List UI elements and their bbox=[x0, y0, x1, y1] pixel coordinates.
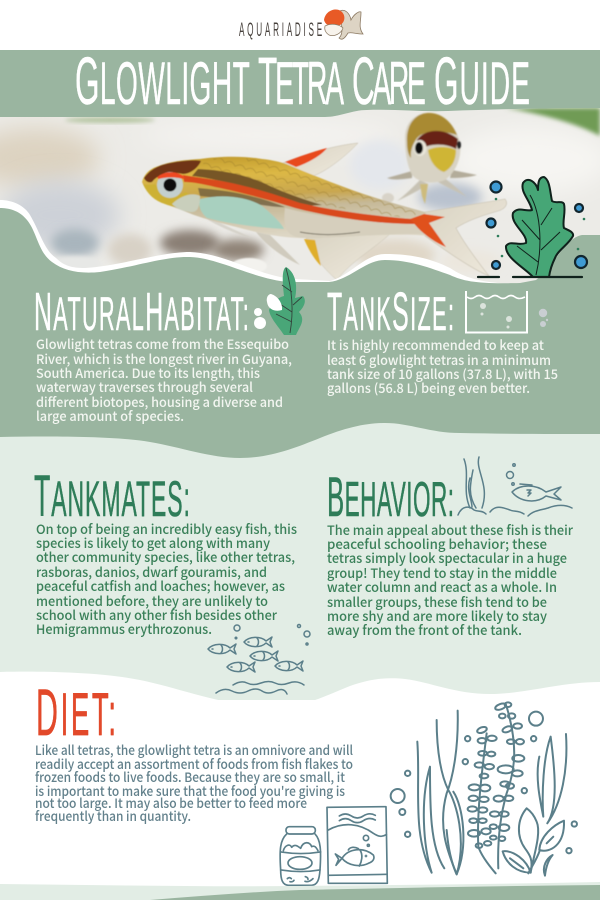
fish photo bbox=[0, 100, 600, 290]
icon: green leaf with bubbles bbox=[478, 177, 587, 277]
logo bbox=[239, 9, 363, 41]
lower dark stripe bbox=[198, 188, 285, 207]
white stripe along photo bbox=[0, 200, 510, 295]
diet text: Like all tetras, the glowlight tetra is an omnivore and will bbox=[35, 740, 353, 759]
diet text bbox=[35, 740, 353, 825]
fish body bbox=[142, 157, 428, 238]
light green panel bbox=[0, 423, 600, 700]
diet text: is important to make sure that the food you're giving is bbox=[35, 781, 345, 800]
tankmates text: other community species, like other tetras, bbox=[36, 547, 295, 566]
tankmates text: rasboras, danios, dwarf gouramis, and bbox=[36, 562, 267, 581]
red dorsal base bbox=[285, 148, 327, 167]
behavior text bbox=[327, 520, 574, 639]
tank size text: least 6 glowlight tetras in a minimum bbox=[327, 350, 551, 369]
title bbox=[75, 45, 530, 119]
icon: food jar bbox=[280, 827, 321, 885]
natural habitat text: River, which is the longest river in Guyana, bbox=[36, 349, 292, 368]
natural habitat text: large amount of species. bbox=[36, 406, 184, 425]
diet text: frozen foods to live foods. Because they are so small, it bbox=[35, 767, 345, 786]
natural habitat text: waterway traverses through several bbox=[36, 377, 253, 396]
dorsal fin bbox=[283, 143, 358, 176]
natural habitat text bbox=[36, 334, 292, 425]
teal belly sheen bbox=[199, 196, 284, 229]
heading: tank size: TANKSIZE: bbox=[327, 281, 454, 342]
silver lower flank bbox=[284, 208, 364, 224]
diet text: readily accept an assortment of foods from fish flakes to bbox=[35, 754, 353, 773]
title: GUIDE bbox=[434, 45, 530, 119]
behavior text: more shy and are more likely to stay bbox=[327, 606, 547, 625]
photo background bokeh bbox=[0, 108, 600, 274]
green upper panel bbox=[0, 50, 600, 460]
panel: tank size bbox=[327, 281, 558, 397]
natural habitat text: Glowlight tetras come from the Essequibo bbox=[36, 334, 289, 353]
behavior text: group! They tend to stay in the middle bbox=[327, 563, 557, 582]
panel: behavior bbox=[327, 457, 574, 639]
title: GLOWLIGHT bbox=[75, 45, 250, 119]
heading: natural habitat: NATURALHABITAT: bbox=[34, 281, 249, 342]
behavior text: The main appeal about these fish is their bbox=[327, 520, 574, 539]
panel: natural habitat bbox=[34, 267, 305, 425]
behavior text: water column and react as a whole. In bbox=[327, 577, 557, 596]
tank size text: It is highly recommended to keep at bbox=[327, 335, 544, 354]
white lower panel bbox=[0, 672, 600, 900]
diet text: not too large. It may also be better to feed more bbox=[35, 793, 307, 812]
tank size text: tank size of 10 gallons (37.8 L), with 15 bbox=[327, 364, 558, 383]
main glowlight tetra bbox=[142, 143, 507, 280]
icon: school of fish bbox=[208, 624, 310, 694]
tank size text bbox=[327, 335, 558, 397]
tankmates text: Hemigrammus erythrozonus. bbox=[36, 619, 212, 638]
icon: seaweed and fish bbox=[458, 457, 572, 516]
behavior text: peaceful schooling behavior; these bbox=[327, 534, 547, 553]
tank size text: gallons (56.8 L) being even better. bbox=[327, 378, 530, 397]
tankmates text: peaceful catfish and loaches; however, as bbox=[36, 576, 285, 595]
natural habitat text: South America. Due to its length, this bbox=[36, 363, 260, 382]
behavior text: tetras simply look spectacular in a huge bbox=[327, 548, 567, 567]
footer waves bbox=[0, 882, 600, 900]
tankmates text bbox=[36, 519, 297, 638]
anal fin bbox=[306, 233, 391, 280]
natural habitat text: different biotopes, housing a diverse and bbox=[36, 392, 283, 411]
head shading bbox=[144, 160, 201, 182]
title: CARE bbox=[352, 45, 426, 119]
panel: diet bbox=[35, 676, 577, 885]
ventral fin bbox=[256, 232, 300, 265]
icon: fish food bag bbox=[327, 807, 387, 883]
heading: diet: DIET: bbox=[36, 676, 116, 749]
diet text: frequently than in quantity. bbox=[35, 806, 191, 825]
tankmates text: school with any other fish besides other bbox=[36, 605, 278, 624]
gill shimmer bbox=[172, 194, 200, 212]
icon: aquatic plants bbox=[391, 702, 577, 876]
title: TETRA bbox=[258, 45, 344, 119]
logo wordmark: AQUARIADISE bbox=[239, 19, 322, 41]
heading: tankmates: TANKMATES: bbox=[34, 463, 190, 529]
tankmates text: mentioned before, they are unlikely to bbox=[36, 591, 268, 610]
eye bbox=[157, 172, 184, 198]
body scales bbox=[200, 158, 420, 218]
red lateral stripe bbox=[183, 175, 416, 224]
behavior text: away from the front of the tank. bbox=[327, 620, 522, 639]
icon: aquarium tank bbox=[466, 291, 548, 332]
dark lateral stripe bbox=[192, 169, 322, 206]
heading: behavior: BEHAVIOR: bbox=[327, 467, 454, 529]
tail fin bbox=[425, 199, 507, 276]
logo goldfish bbox=[324, 9, 363, 39]
icon: seaweed leaf bbox=[254, 267, 305, 335]
tankmates text: species is likely to get along with many bbox=[36, 533, 270, 552]
behavior text: smaller groups, these fish tend to be bbox=[327, 592, 547, 611]
tankmates text: On top of being an incredibly easy fish, this bbox=[36, 519, 297, 538]
green lower wave bbox=[0, 208, 600, 300]
panel: tankmates bbox=[34, 463, 310, 694]
red tail patch bbox=[410, 214, 446, 247]
second fish, background bbox=[387, 113, 477, 204]
